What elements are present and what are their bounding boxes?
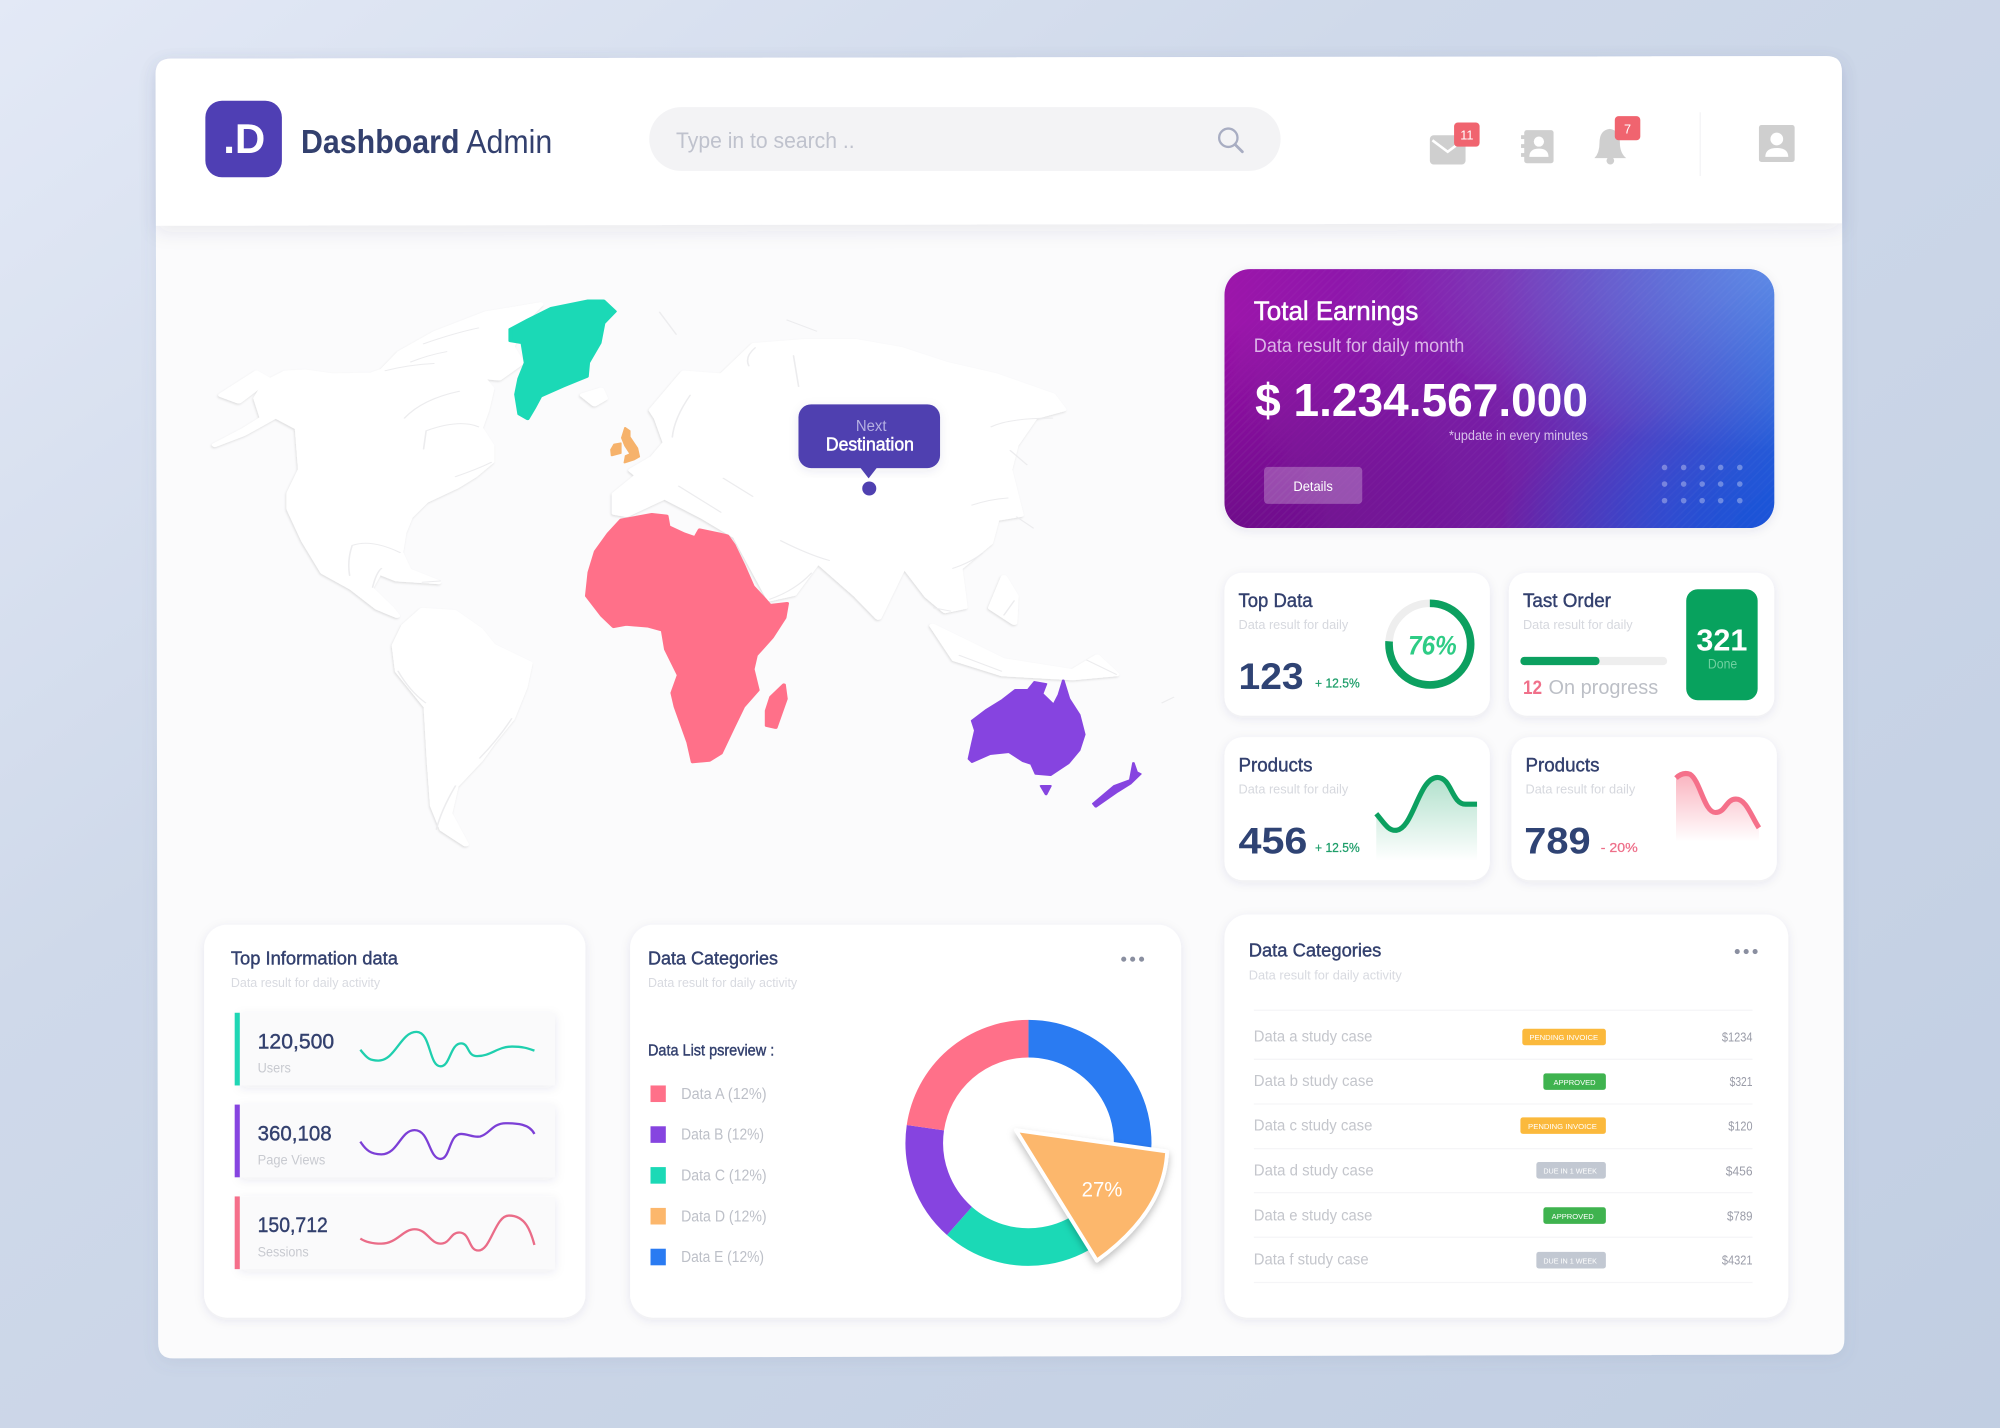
panel: data categories donut — [630, 925, 1181, 1318]
earnings note: *update in every minutes — [1449, 428, 1588, 443]
ring gauge 76% — [1389, 603, 1471, 685]
menu dots — [1735, 949, 1758, 954]
table row d: $456 — [1726, 1163, 1753, 1178]
legend: Data D (12%) — [681, 1208, 767, 1225]
panel: tast order: On progress — [1548, 677, 1658, 699]
map: coastline details — [349, 312, 1174, 829]
done tile: Done — [1708, 656, 1737, 671]
stat row: users: Users — [258, 1061, 291, 1076]
logo badge: .D — [223, 115, 265, 162]
table row e: APPROVED — [1552, 1212, 1594, 1221]
table row c: PENDING INVOICE — [1528, 1122, 1597, 1131]
panel: products up: + 12.5% — [1315, 840, 1360, 855]
callout: next destination: Destination — [826, 433, 914, 454]
legend: Data E (12%) — [681, 1249, 764, 1266]
icon: bell — [1594, 116, 1640, 165]
panel: products down: Data result for daily — [1526, 781, 1636, 796]
progress bar — [1520, 657, 1667, 665]
pie callout 27%: 27% — [1082, 1176, 1122, 1201]
table row f: $4321 — [1722, 1253, 1753, 1268]
panel: data categories table — [1224, 915, 1788, 1318]
panel: data categories table: Data result for daily activity — [1249, 968, 1402, 983]
callout: next destination: Next — [856, 418, 887, 435]
panel: products up — [1224, 737, 1490, 880]
stat row: users: 120,500 — [258, 1028, 334, 1053]
line chart: green — [1376, 777, 1477, 861]
panel: products down: 789 — [1524, 820, 1591, 861]
details button: Details — [1293, 478, 1333, 494]
table row a — [1254, 1028, 1753, 1045]
panel: products up: Products — [1239, 756, 1312, 777]
stat row: users — [235, 1013, 555, 1085]
done tile — [1686, 589, 1758, 700]
table row b — [1254, 1073, 1753, 1090]
table row e: Data e study case — [1254, 1208, 1372, 1225]
panel: top data: Data result for daily — [1239, 617, 1349, 632]
world map — [215, 301, 1174, 844]
line chart: red — [1676, 774, 1759, 842]
panel: tast order: Tast Order — [1523, 591, 1612, 612]
legend: Data A (12%) — [681, 1086, 767, 1103]
table row b: $321 — [1730, 1074, 1753, 1089]
stat row: sessions: 150,712 — [258, 1212, 328, 1237]
continent: Greenland — [510, 301, 615, 419]
table row e: $789 — [1727, 1209, 1753, 1224]
table row a: $1234 — [1722, 1029, 1753, 1044]
panel: products down: - 20% — [1601, 840, 1638, 855]
table row f: DUE IN 1 WEEK — [1543, 1256, 1598, 1265]
icon: bell: 7 — [1624, 121, 1631, 136]
legend: Data List psreview : — [648, 1042, 774, 1059]
icon: user profile — [1759, 125, 1795, 162]
panel: tast order: Data result for daily — [1523, 617, 1633, 632]
header bar — [156, 56, 1842, 226]
stat row: sessions: Sessions — [258, 1244, 309, 1259]
panel: data categories donut: Data result for daily activity — [648, 975, 798, 990]
panel: data categories table: Data Categories — [1249, 940, 1381, 961]
table row c — [1254, 1117, 1753, 1135]
search box: Type in to search .. — [676, 128, 855, 153]
decorative dot grid — [1662, 465, 1743, 503]
ring gauge 76%: 76% — [1408, 630, 1457, 660]
main panel — [156, 56, 1844, 1358]
continent: United Kingdom — [611, 428, 639, 463]
legend: Data B (12%) — [681, 1127, 764, 1144]
continent: Africa — [587, 514, 787, 762]
table row c: Data c study case — [1254, 1118, 1372, 1135]
panel: tast order — [1509, 573, 1774, 716]
panel: products up: 456 — [1239, 820, 1307, 861]
icon: mail — [1430, 122, 1480, 165]
table row d: DUE IN 1 WEEK — [1543, 1166, 1598, 1175]
stat row: page views: Page Views — [258, 1153, 326, 1168]
panel: top information data: Top Information data — [231, 947, 399, 968]
earnings subheading: Data result for daily month — [1254, 336, 1464, 357]
logo badge — [205, 101, 282, 177]
panel: top data — [1224, 573, 1490, 716]
map: white continents — [215, 304, 1116, 844]
panel: data categories donut: Data Categories — [648, 947, 778, 968]
table row e — [1254, 1207, 1753, 1225]
legend: Data C (12%) — [681, 1167, 767, 1184]
donut chart — [924, 1039, 1133, 1247]
table row f — [1254, 1252, 1753, 1269]
table row a: PENDING INVOICE — [1529, 1033, 1598, 1042]
panel: products down: Products — [1526, 756, 1599, 777]
table row b: Data b study case — [1254, 1073, 1374, 1090]
stat row: page views — [235, 1105, 555, 1177]
panel: products up: Data result for daily — [1239, 781, 1349, 796]
panel: top information data — [204, 925, 585, 1318]
panel: products down — [1511, 737, 1777, 880]
continent: Australia and New Zealand — [969, 680, 1140, 807]
earnings value: $ 1.234.567.000 — [1255, 374, 1588, 426]
app title: Dashboard Admin — [301, 124, 552, 161]
icon: contacts — [1521, 130, 1554, 163]
panel: total earnings — [1224, 269, 1774, 528]
pie callout 27% — [1016, 1130, 1167, 1261]
stat row: page views: 360,108 — [258, 1120, 332, 1145]
panel: top data: 123 — [1239, 656, 1304, 697]
table row c: $120 — [1728, 1119, 1753, 1134]
table row b: APPROVED — [1554, 1078, 1596, 1087]
callout: next destination — [798, 404, 940, 496]
table row d: Data d study case — [1254, 1162, 1374, 1179]
search box — [649, 107, 1281, 171]
table row a: Data a study case — [1254, 1028, 1372, 1045]
icon: mail: 11 — [1460, 128, 1473, 143]
panel: top data: + 12.5% — [1315, 676, 1360, 691]
panel: tast order: 12 — [1523, 678, 1542, 699]
table row d — [1254, 1162, 1753, 1179]
stat row: sessions — [235, 1196, 555, 1269]
menu dots — [1121, 957, 1144, 962]
done tile: 321 — [1696, 624, 1747, 658]
panel: top information data: Data result for daily activity — [231, 975, 381, 990]
details button — [1264, 467, 1362, 504]
earnings heading: Total Earnings — [1254, 296, 1418, 326]
legend — [648, 1042, 774, 1266]
panel: top data: Top Data — [1239, 591, 1313, 612]
table row f: Data f study case — [1254, 1252, 1369, 1269]
